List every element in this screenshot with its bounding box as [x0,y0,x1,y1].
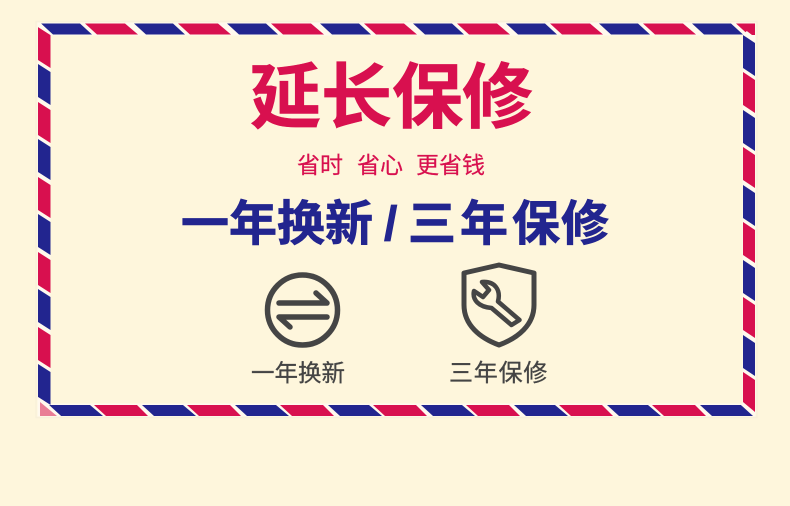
icon: exchange arrows [268,275,338,345]
heading: one-year replacement / three-year warranty: 年 [460,198,508,251]
subtitle: 更省钱 [416,152,485,178]
heading: one-year replacement / three-year warranty: 一 [181,198,229,251]
heading: one-year replacement / three-year warranty: 三 [408,198,456,251]
subtitle [297,152,485,178]
title: 延 [250,59,321,138]
title: 长 [321,59,392,138]
label: three-year warranty: 三年保修 [449,360,548,387]
title: 保 [392,59,463,138]
heading: one-year replacement / three-year warranty: 修 [561,198,609,251]
heading: one-year replacement / three-year warranty: 换 [277,198,325,251]
airmail border frame [36,22,757,418]
heading: one-year replacement / three-year warranty: / [384,198,397,251]
title: 修 [462,59,533,138]
subtitle: 省时 [297,152,343,178]
heading: one-year replacement / three-year warranty [181,198,609,251]
heading: one-year replacement / three-year warranty: 新 [325,198,373,251]
heading: one-year replacement / three-year warranty: 年 [229,198,277,251]
label: one-year replacement: 一年换新 [251,360,345,386]
subtitle: 省心 [357,152,403,178]
title [250,59,533,138]
icon: shield with wrench [464,265,534,345]
heading: one-year replacement / three-year warranty: 保 [512,198,560,251]
